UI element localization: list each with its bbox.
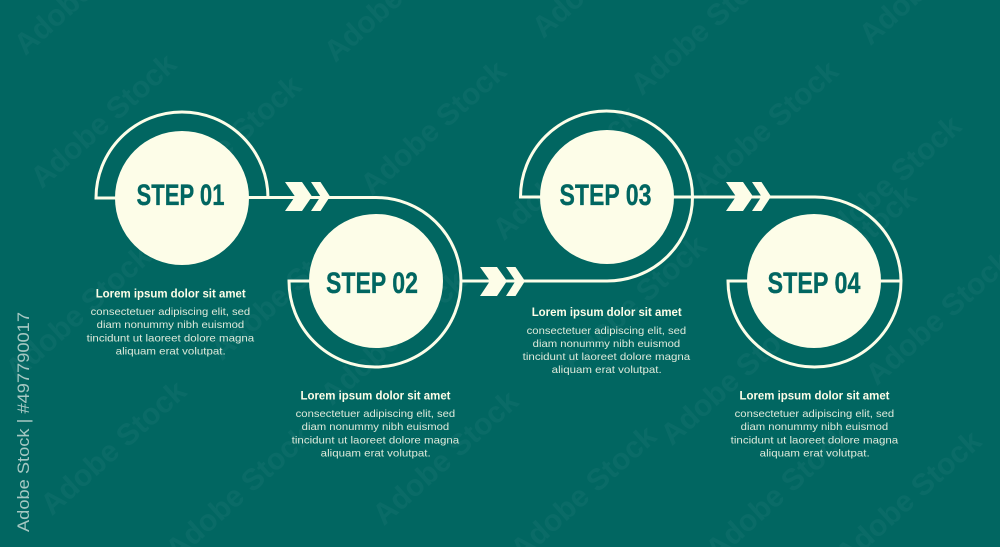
text block: step 3 <box>523 307 690 376</box>
text block: step 4: Lorem ipsum dolor sit amet <box>740 390 890 402</box>
text block: step 3: Lorem ipsum dolor sit amet <box>532 307 682 319</box>
text block: step 2: consectetuer adipiscing elit, sed <box>296 408 455 420</box>
connector: step 1 arc into step 2 arc <box>96 112 495 367</box>
stock image credit: Adobe Stock | #497790017 <box>14 312 33 532</box>
watermark pattern: Adobe Stock <box>764 179 923 327</box>
step 1 badge: STEP 01 <box>136 179 224 212</box>
watermark pattern: Adobe Stock <box>314 264 473 412</box>
text block: step 3: consectetuer adipiscing elit, sed <box>527 325 686 337</box>
text block: step 2: diam nonummy nibh euismod <box>302 421 449 433</box>
arrow: step 1 to step 2 <box>285 182 330 211</box>
watermark pattern: Adobe Stock <box>24 47 183 195</box>
text block: step 2 <box>292 390 459 460</box>
connector: step 3 to step 4 arc <box>728 197 901 367</box>
step 4 badge <box>747 214 881 348</box>
step 4 badge: STEP 04 <box>768 267 861 300</box>
step 2 badge <box>309 214 443 348</box>
arrow: step 3 to step 4 <box>726 182 771 211</box>
text block: step 4 <box>731 390 898 460</box>
step 3 badge: STEP 03 <box>560 179 652 212</box>
text block: step 4: diam nonummy nibh euismod <box>741 421 888 433</box>
step 2 badge: STEP 02 <box>326 267 418 300</box>
watermark pattern: Adobe Stock <box>654 304 813 452</box>
text block: step 2: Lorem ipsum dolor sit amet <box>300 390 451 402</box>
connector: step 2 to step 3 arc <box>495 111 771 281</box>
watermark pattern: Adobe Stock <box>34 374 193 522</box>
watermark pattern: Adobe Stock <box>149 69 308 217</box>
text block: step 3: tincidunt ut laoreet dolore magna <box>523 351 690 363</box>
watermark pattern: Adobe Stock <box>486 99 645 247</box>
watermark pattern: Adobe Stock <box>204 219 363 367</box>
text block: step 1: tincidunt ut laoreet dolore magna <box>87 332 254 344</box>
watermark pattern: Adobe Stock <box>686 54 845 202</box>
arrow: step 2 to step 3 <box>480 267 525 296</box>
watermark pattern: Adobe Stock <box>554 229 713 377</box>
text block: step 4: aliquam erat volutpat. <box>760 448 870 460</box>
text block: step 1: diam nonummy nibh euismod <box>97 319 244 331</box>
text block: step 3: diam nonummy nibh euismod <box>533 338 680 350</box>
step 3 badge <box>540 130 674 264</box>
text block: step 2: tincidunt ut laoreet dolore magna <box>292 434 459 446</box>
text block: step 2: aliquam erat volutpat. <box>321 448 431 460</box>
watermark pattern: Adobe Stock <box>0 239 158 387</box>
watermark pattern: Adobe Stock <box>354 54 513 202</box>
text block: step 4: tincidunt ut laoreet dolore magna <box>731 434 898 446</box>
watermark pattern: Adobe Stock <box>366 384 525 532</box>
text block: step 4: consectetuer adipiscing elit, sed <box>735 408 894 420</box>
text block: step 1 <box>87 288 254 358</box>
text block: step 1: consectetuer adipiscing elit, sed <box>91 306 250 318</box>
watermark pattern: Adobe Stock <box>809 109 968 257</box>
connector lines <box>96 111 901 367</box>
text block: step 1: Lorem ipsum dolor sit amet <box>96 288 246 300</box>
text block: step 3: aliquam erat volutpat. <box>552 364 662 376</box>
step 1 badge <box>115 131 249 265</box>
text block: step 1: aliquam erat volutpat. <box>116 346 226 358</box>
